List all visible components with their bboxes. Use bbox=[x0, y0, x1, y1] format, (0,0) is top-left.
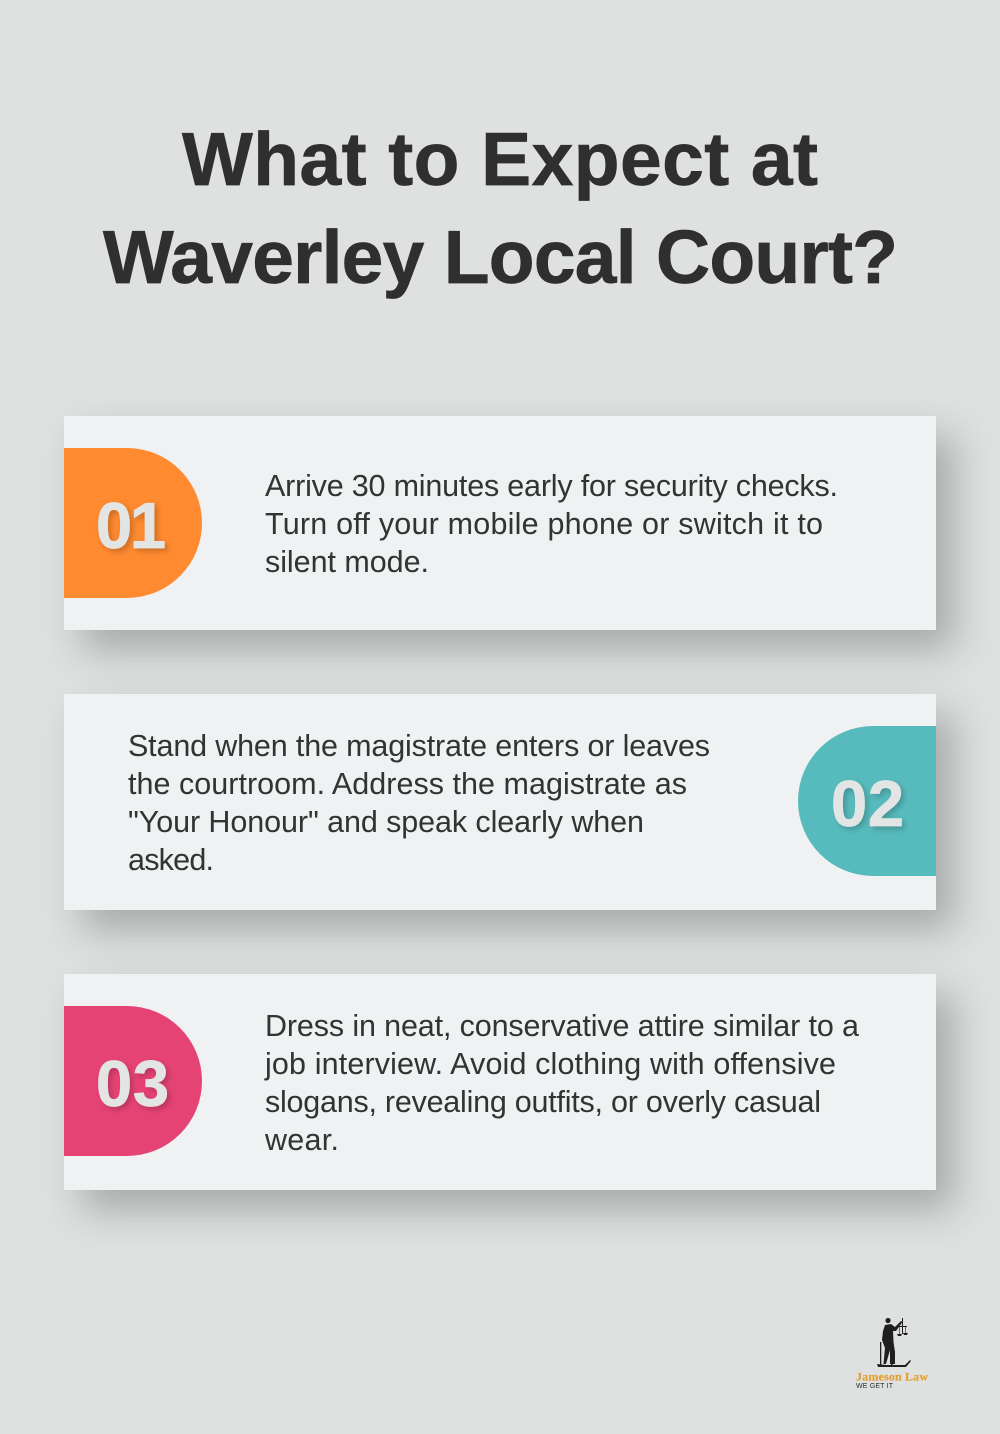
panel: step 02 bbox=[64, 694, 936, 910]
title: What to Expect at bbox=[182, 117, 818, 201]
logo: Jameson Law bbox=[856, 1318, 928, 1390]
title bbox=[102, 117, 898, 299]
title: Waverley Local Court? bbox=[103, 215, 898, 299]
text: dress code: slogans, revealing outfits, or overly casual bbox=[265, 1085, 821, 1119]
text: dress code: Dress in neat, conservative attire similar to a bbox=[265, 1009, 859, 1043]
logo tagline: WE GET IT bbox=[856, 1383, 894, 1390]
badge: 03 bbox=[64, 1006, 202, 1156]
badge: 03: 03 bbox=[96, 1047, 169, 1120]
badge: 01 bbox=[64, 448, 202, 598]
text: arrival advice: Arrive 30 minutes early for security checks. bbox=[265, 469, 838, 503]
text: courtroom etiquette: "Your Honour" and speak clearly when bbox=[128, 805, 644, 839]
text: dress code bbox=[264, 1009, 859, 1157]
icon: lady justice bbox=[877, 1318, 911, 1367]
text: arrival advice: Turn off your mobile phone or switch it to bbox=[265, 507, 823, 541]
panel: step 03 bbox=[64, 974, 936, 1190]
text: courtroom etiquette: asked. bbox=[128, 843, 214, 877]
text: courtroom etiquette bbox=[128, 729, 710, 877]
badge: 02: 02 bbox=[831, 767, 904, 840]
text: dress code: job interview. Avoid clothing with offensive bbox=[264, 1047, 836, 1081]
panel: step 01 bbox=[64, 416, 936, 630]
text: courtroom etiquette: Stand when the magistrate enters or leaves bbox=[128, 729, 710, 763]
badge: 01: 01 bbox=[96, 489, 166, 562]
text: dress code: wear. bbox=[264, 1123, 339, 1157]
text: courtroom etiquette: the courtroom. Address the magistrate as bbox=[128, 767, 687, 801]
badge: 02 bbox=[798, 726, 936, 876]
logo name: Jameson Law bbox=[856, 1370, 928, 1384]
text: arrival advice: silent mode. bbox=[265, 545, 429, 579]
text: arrival advice bbox=[265, 469, 838, 579]
